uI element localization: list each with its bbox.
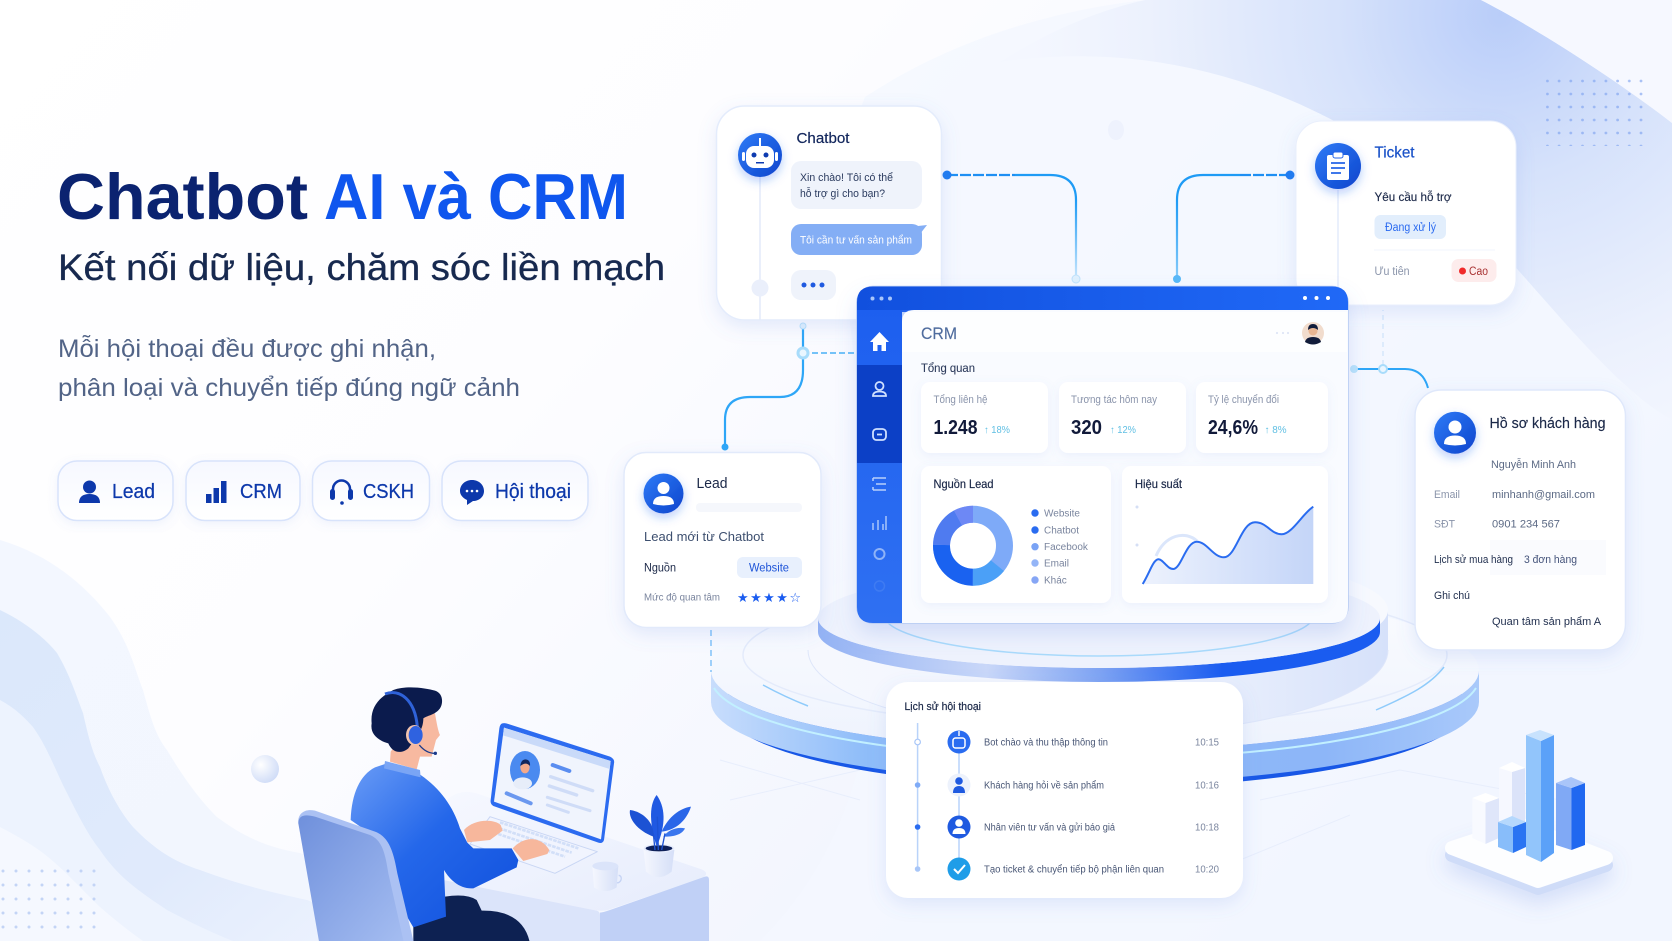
CRM heading row <box>902 312 1347 352</box>
donut legend: Khác <box>1044 576 1067 586</box>
greeting bubble <box>791 161 922 209</box>
row: bot greeting: 10:15 <box>1195 738 1219 748</box>
avatar <box>1302 322 1324 344</box>
panel: CRM window <box>857 286 1348 623</box>
email row: Email <box>1434 489 1460 501</box>
chart card: performance: Hiệu suất <box>1135 477 1183 491</box>
phone row: SĐT <box>1434 518 1455 530</box>
request label: Yêu cầu hỗ trợ <box>1374 189 1452 204</box>
phone row: 0901 234 567 <box>1492 518 1560 530</box>
stat: total contacts: Tổng liên hệ <box>934 394 988 406</box>
timeline <box>915 723 959 872</box>
profile heading: Hồ sơ khách hàng <box>1490 415 1606 432</box>
email row: minhanh@gmail.com <box>1492 489 1595 501</box>
stat: today interactions: 320 <box>1071 417 1102 439</box>
header bar <box>857 286 1348 310</box>
icon: robot <box>738 133 782 177</box>
chip: CRM: CRM <box>240 481 282 503</box>
row: customer asks <box>948 774 1219 796</box>
chip: Lead: Lead <box>112 481 155 503</box>
panel: lead <box>624 452 821 628</box>
user bubble: Tôi cần tư vấn sản phẩm <box>800 234 912 246</box>
notes <box>1434 590 1602 628</box>
chip: Hội thoại <box>442 461 588 520</box>
icon: contact <box>873 382 886 396</box>
chip row <box>58 461 588 520</box>
priority pill: Cao <box>1469 266 1488 278</box>
CRM heading row: CRM <box>921 324 957 343</box>
stat: today interactions: ↑ 12% <box>1110 425 1136 436</box>
stat: conversion: 24,6% <box>1208 417 1258 439</box>
purchase history row: 3 đơn hàng <box>1524 554 1577 566</box>
greeting bubble: Xin chào! Tôi có thể <box>800 172 893 184</box>
lead label: Lead <box>696 476 728 492</box>
platform <box>711 550 1479 788</box>
line chart <box>1136 506 1313 584</box>
donut legend: Facebook <box>1044 542 1089 553</box>
chart card: performance <box>1122 466 1328 603</box>
content area <box>902 310 1348 623</box>
stat: total contacts: 1.248 <box>934 417 978 439</box>
source pill <box>737 557 802 578</box>
subtitle: Kết nối dữ liệu, chăm sóc liền mạch <box>58 247 665 288</box>
headset <box>385 693 437 755</box>
chip: CSKH <box>312 461 430 520</box>
icon: faint <box>874 581 884 591</box>
bar: front short <box>1498 816 1526 853</box>
connector: lead to platform <box>710 630 712 672</box>
connector: chatbot to CRM <box>942 170 1080 283</box>
description: Mỗi hội thoại đều được ghi nhận, <box>58 334 436 363</box>
user bubble <box>791 224 927 255</box>
email row <box>1434 489 1595 501</box>
chair <box>298 810 414 941</box>
icon: isometric bar chart <box>1452 730 1606 888</box>
priority label: Ưu tiên <box>1374 266 1410 278</box>
icon: home <box>870 332 889 351</box>
chip: CRM <box>186 461 300 520</box>
stat: today interactions: Tương tác hôm nay <box>1071 394 1157 406</box>
faint sphere <box>1108 120 1124 140</box>
donut chart <box>942 514 1004 577</box>
status pill: Đang xử lý <box>1385 222 1436 234</box>
connector: lead to CRM <box>722 323 855 450</box>
outer disc <box>711 583 1479 788</box>
icon: chart <box>873 516 886 530</box>
row: customer asks: 10:16 <box>1195 780 1219 792</box>
chart card: lead sources <box>921 466 1111 603</box>
stat: conversion: Tỷ lệ chuyển đổi <box>1208 394 1279 406</box>
chatbot label: Chatbot <box>796 130 850 147</box>
trousers <box>413 896 530 941</box>
row: ticket created <box>948 858 1219 880</box>
middle disc <box>808 550 1388 735</box>
mug <box>592 862 621 891</box>
row: ticket created: 10:20 <box>1195 864 1219 876</box>
chip: CSKH: CSKH <box>363 481 414 503</box>
icon: list <box>873 478 886 490</box>
purchase history row <box>1434 540 1606 575</box>
row: ticket created: Tạo ticket & chuyển tiếp bộ phận liên quan <box>984 864 1164 876</box>
chip: Lead <box>58 461 173 520</box>
panel: chatbot <box>716 106 942 320</box>
row: bot greeting <box>948 730 1219 754</box>
bar: white short <box>1472 793 1499 844</box>
top disc <box>818 568 1380 682</box>
hands <box>464 821 549 861</box>
connector: CRM to profile <box>1350 310 1428 388</box>
row: staff quote: 10:18 <box>1195 822 1219 834</box>
bar: tallest blue <box>1526 730 1554 862</box>
source label: Nguồn <box>644 562 676 574</box>
source pill: Website <box>749 562 789 574</box>
bar: white tall <box>1499 762 1525 835</box>
stat: today interactions <box>1059 382 1186 453</box>
decorative sphere <box>251 755 279 783</box>
overview heading: Tổng quan <box>921 361 975 375</box>
illustration: person at desk <box>298 687 709 941</box>
panel: ticket <box>1296 121 1516 305</box>
interest label: Mức độ quan tâm <box>644 592 720 604</box>
row: customer asks: Khách hàng hỏi về sản phẩm <box>984 780 1104 792</box>
profile name: Nguyễn Minh Anh <box>1491 458 1576 471</box>
chip: Hội thoại: Hội thoại <box>495 481 571 503</box>
donut legend: Email <box>1044 558 1069 570</box>
donut legend: Website <box>1044 508 1080 520</box>
stat: conversion: ↑ 8% <box>1264 425 1287 436</box>
rating stars: ★★★★☆ <box>737 591 801 606</box>
ticket label: Ticket <box>1374 144 1415 162</box>
collar <box>384 761 421 777</box>
title: AI và CRM <box>324 160 628 233</box>
history heading: Lịch sử hội thoại <box>904 701 981 713</box>
description: phân loại và chuyển tiếp đúng ngữ cảnh <box>58 374 520 402</box>
description <box>58 334 520 402</box>
panel: conversation history <box>886 682 1243 898</box>
row: bot greeting: Bot chào và thu thập thông tin <box>984 738 1108 748</box>
connector: ticket to CRM <box>1173 170 1294 283</box>
stat: conversion <box>1196 382 1328 453</box>
icon: gear <box>874 549 884 559</box>
panel: customer profile <box>1415 390 1626 650</box>
typing bubble <box>791 270 836 300</box>
priority pill <box>1452 259 1496 282</box>
icon: lead avatar <box>644 474 684 514</box>
icon: clipboard <box>1315 143 1361 189</box>
title <box>57 160 628 233</box>
notes: Quan tâm sản phẩm A <box>1492 616 1602 628</box>
lead description: Lead mới từ Chatbot <box>644 529 764 544</box>
title: Chatbot <box>57 160 308 233</box>
stat: total contacts: ↑ 18% <box>984 425 1010 436</box>
donut legend <box>1031 508 1089 586</box>
icon: profile avatar <box>1434 412 1476 454</box>
notes: Ghi chú <box>1434 590 1470 602</box>
desk <box>413 792 709 941</box>
purchase history row: Lịch sử mua hàng <box>1434 554 1513 566</box>
sweater <box>351 764 518 927</box>
neck and face <box>390 713 440 769</box>
hair <box>371 687 442 752</box>
phone row <box>1434 518 1560 530</box>
row: staff quote: Nhân viên tư vấn và gửi báo giá <box>984 822 1115 834</box>
icon: chat <box>873 429 886 440</box>
row: staff quote <box>948 816 1219 838</box>
donut legend: Chatbot <box>1044 526 1079 536</box>
stat: total contacts <box>921 382 1048 453</box>
base plate <box>1452 825 1606 888</box>
plant <box>630 795 691 877</box>
status pill <box>1374 215 1446 239</box>
laptop <box>470 723 614 873</box>
greeting bubble: hỗ trợ gì cho bạn? <box>800 187 885 200</box>
chart card: lead sources: Nguồn Lead <box>934 477 994 491</box>
sidebar <box>857 310 902 623</box>
bar: dark blue <box>1556 777 1585 850</box>
